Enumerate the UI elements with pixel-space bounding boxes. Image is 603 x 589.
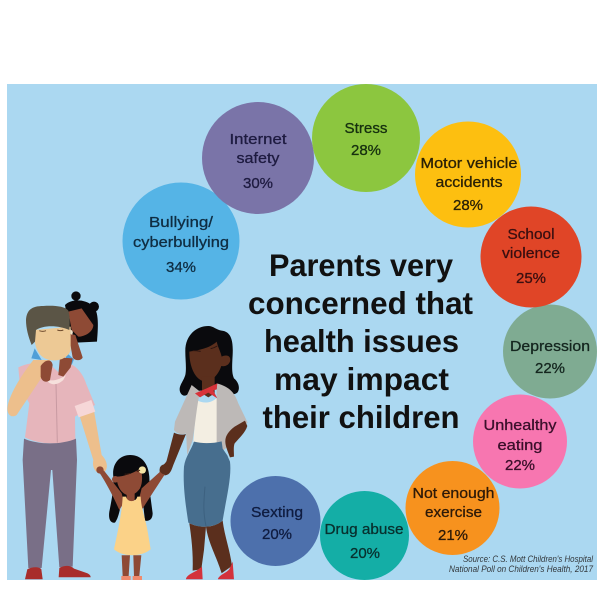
bubble: motor vehicle accidents 28% [415,122,521,228]
bubble: not enough exercise 21% [406,461,500,555]
bubble: school violence 25%: 25% [516,270,546,287]
bubble: internet safety 30%: 30% [243,175,273,192]
bubble: stress 28%: Stress [344,120,388,137]
bubble: drug abuse 20%: 20% [350,545,380,562]
figure: father with daughter on shoulders [7,291,107,579]
illustration: family [7,291,248,580]
bubble: drug abuse 20% [320,491,409,580]
figure: small girl in yellow dress [96,455,170,580]
bubble: motor vehicle accidents 28%: Motor vehicle [420,155,518,172]
source note [449,554,594,574]
heading: health issues [264,323,459,359]
bubble: not enough exercise 21%: 21% [438,527,468,544]
heading: Parents very [269,247,453,283]
bubble: depression 22% [503,304,597,398]
bubble: unhealthy eating 22%: 22% [505,457,535,474]
bubble: sexting 20% [230,476,320,566]
bubble: drug abuse 20%: Drug abuse [324,521,404,538]
bubble: depression 22%: Depression [510,338,590,355]
bubble: depression 22%: 22% [535,360,565,377]
bubble: bullying/cyberbullying 34%: 34% [166,259,196,276]
bubble: bullying/cyberbullying 34%: cyberbullying [133,234,229,251]
bubble: stress 28% [312,84,420,192]
heading: may impact [274,361,450,397]
bubble: motor vehicle accidents 28%: accidents [436,174,502,191]
bubble: stress 28%: 28% [351,142,381,159]
heading: their children [262,399,460,435]
figure: mother [160,326,248,579]
bubble: motor vehicle accidents 28%: 28% [453,197,483,214]
bubble: school violence 25% [480,206,582,308]
bubble: unhealthy eating 22%: eating [498,437,542,454]
bubble: not enough exercise 21%: exercise [425,504,482,521]
bubble: internet safety 30%: Internet [230,131,287,148]
bubble: internet safety 30% [202,102,314,214]
bubble: bullying/cyberbullying 34%: Bullying/ [149,214,214,231]
bubble: sexting 20%: 20% [262,526,292,543]
bubble: school violence 25%: violence [502,245,560,262]
heading: concerned that [248,285,474,321]
bubble: not enough exercise 21%: Not enough [412,485,494,502]
bubble: internet safety 30%: safety [236,150,280,167]
heading [248,247,474,435]
bubble: unhealthy eating 22% [473,394,567,488]
bubble: sexting 20%: Sexting [251,504,303,521]
bubble: bullying/cyberbullying 34% [122,182,240,300]
bubble: school violence 25%: School [508,226,554,243]
bubble: unhealthy eating 22%: Unhealthy [484,417,557,434]
